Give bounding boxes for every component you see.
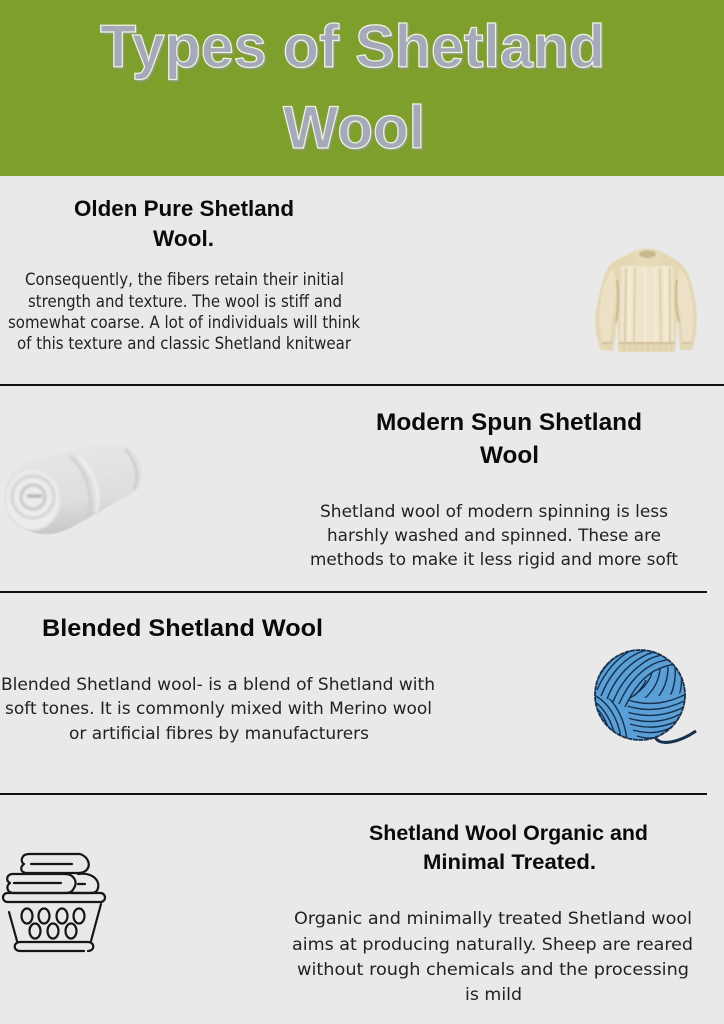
- title: [100, 13, 606, 162]
- heading: Olden Pure: Olden Pure Shetland: [74, 196, 294, 221]
- text: Blended description: or artificial fibres by manufacturers: [69, 724, 369, 743]
- text: Organic description: without rough chemicals and the processing: [297, 960, 689, 979]
- panel: Olden Pure Shetland Wool: [8, 196, 697, 353]
- text: Olden Pure description: [8, 270, 360, 353]
- text: Olden Pure description: strength and texture. The wool is stiff and: [28, 292, 342, 311]
- text: Olden Pure description: of this texture and classic Shetland knitwear: [17, 334, 351, 353]
- heading: Modern Spun: Wool: [480, 442, 539, 469]
- header band: [0, 0, 724, 176]
- text: Organic description: aims at producing naturally. Sheep are reared: [292, 935, 693, 954]
- text: Organic description: [292, 909, 693, 1004]
- panel: Blended Shetland Wool: [1, 615, 696, 745]
- text: Modern Spun description: Shetland wool of modern spinning is less: [320, 502, 668, 521]
- divider: [0, 793, 707, 795]
- text: Olden Pure description: somewhat coarse. A lot of individuals will think: [8, 313, 360, 332]
- title: Wool: [283, 94, 425, 161]
- text: Blended description: soft tones. It is commonly mixed with Merino wool: [5, 699, 432, 718]
- heading: Organic: Shetland Wool Organic and: [369, 822, 648, 845]
- icon: cream sweater: [595, 248, 697, 352]
- text: Organic description: is mild: [465, 985, 522, 1004]
- yarn outline: [595, 650, 685, 740]
- panel: Shetland Wool Organic and Minimal Treated: [3, 822, 693, 1004]
- icon: blue yarn ball: [594, 649, 697, 744]
- heading: Modern Spun: [376, 409, 642, 469]
- heading: Olden Pure: Wool.: [153, 226, 214, 251]
- heading: Blended: Blended Shetland Wool: [42, 615, 323, 642]
- heading: Modern Spun: Modern Spun Shetland: [376, 409, 642, 436]
- divider: [0, 384, 724, 386]
- text: Modern Spun description: harshly washed and spinned. These are: [327, 526, 661, 545]
- title: Types of Shetland: [102, 14, 606, 82]
- heading: Organic: Minimal Treated.: [423, 851, 596, 874]
- title: Wool: [284, 96, 426, 162]
- text: Blended description: [1, 675, 435, 743]
- divider: [0, 591, 707, 593]
- heading: Olden Pure: [74, 196, 294, 251]
- text: Blended description: Blended Shetland wool- is a blend of Shetland with: [1, 675, 435, 694]
- yarn tail: [655, 731, 696, 742]
- text: Modern Spun description: methods to make it less rigid and more soft: [310, 550, 679, 569]
- panel: Modern Spun Shetland Wool: [4, 409, 679, 569]
- title: Types of Shetland: [100, 13, 605, 80]
- text: Organic description: Organic and minimally treated Shetland wool: [294, 909, 692, 928]
- text: Modern Spun description: [310, 502, 679, 569]
- heading: Organic: [369, 822, 648, 874]
- icon: laundry basket: [3, 854, 105, 951]
- icon: rolled white towel: [4, 444, 142, 534]
- text: Olden Pure description: Consequently, the fibers retain their initial: [25, 270, 344, 289]
